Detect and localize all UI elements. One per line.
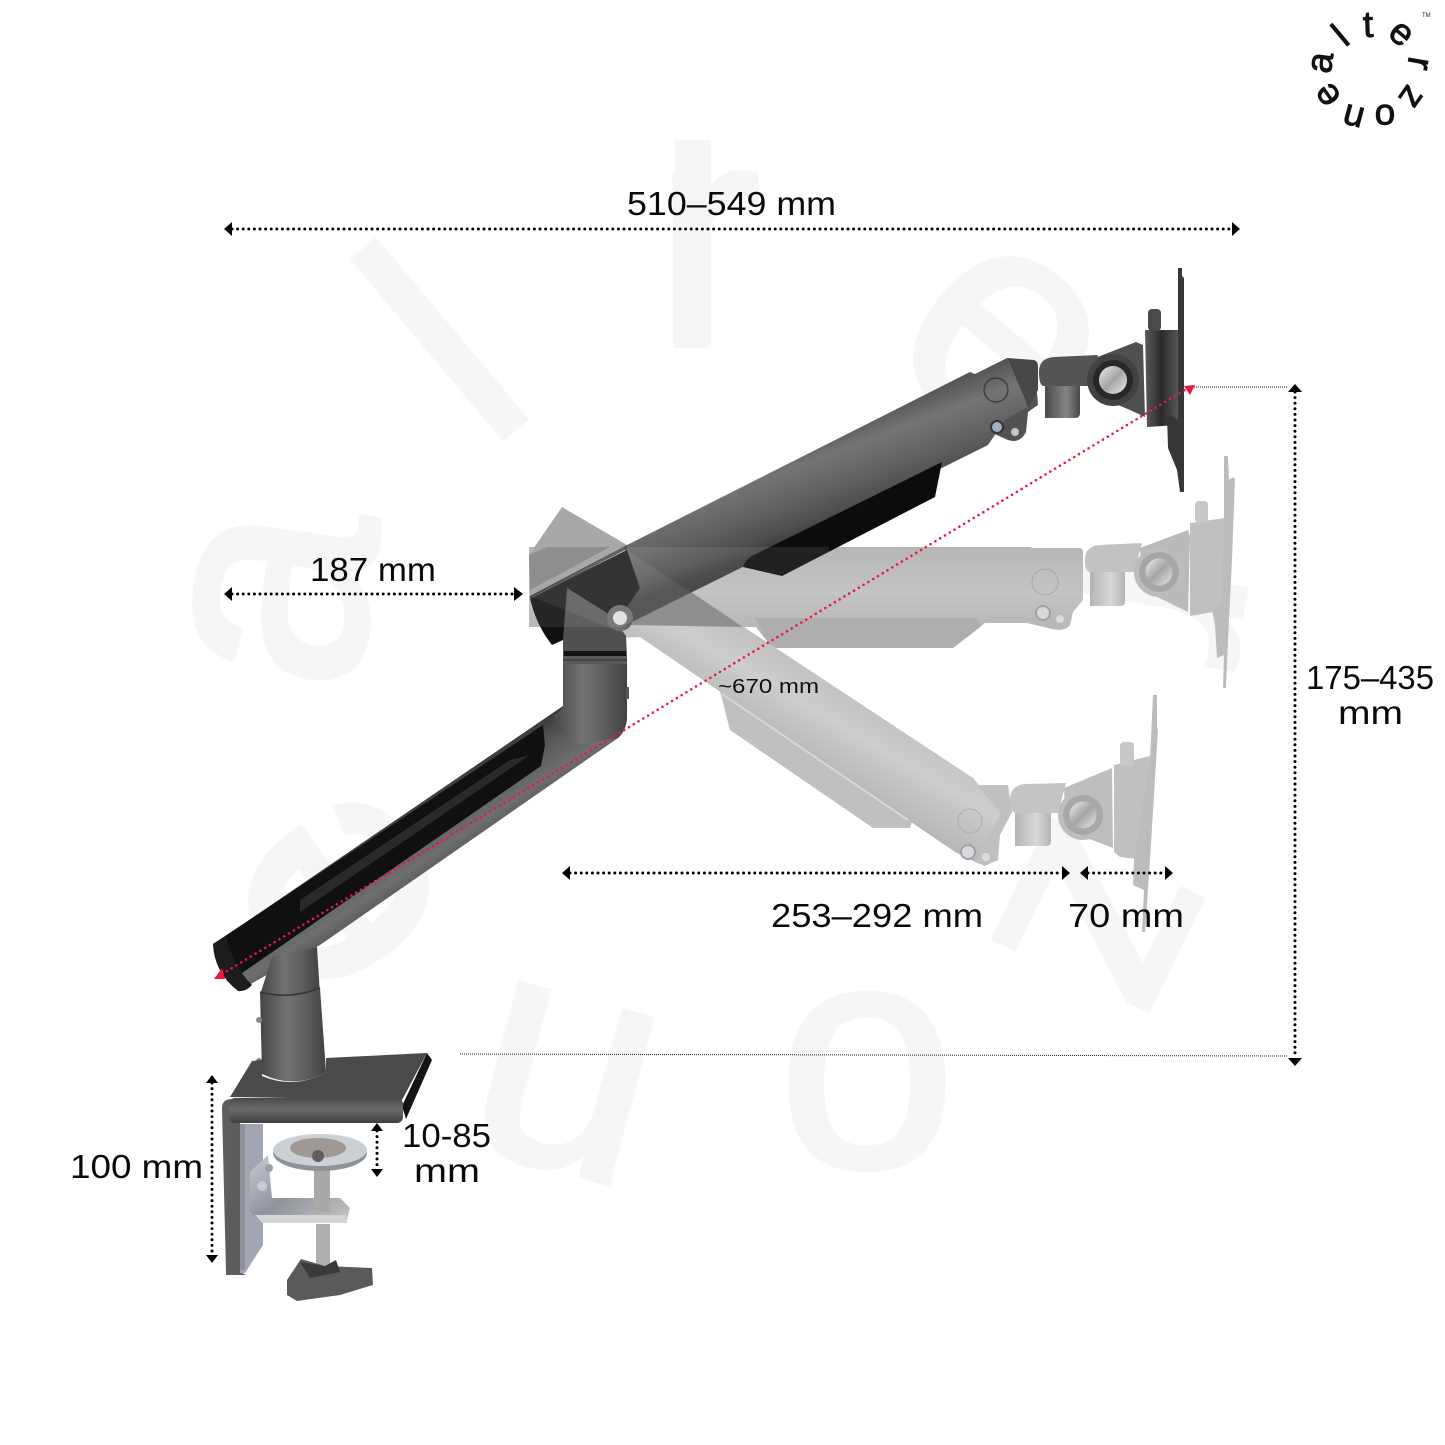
watermark: large brand letters: n bbox=[425, 913, 690, 1305]
dimension: 70 mm bbox=[1068, 866, 1184, 934]
watermark: large brand letters: a bbox=[68, 478, 447, 706]
dimension: 100 mm bbox=[70, 1075, 218, 1263]
brand logo: e bbox=[1303, 76, 1349, 116]
dimension: 10-85 mm bbox=[371, 1117, 491, 1189]
ghost arm: lowered position bbox=[529, 507, 1158, 932]
watermark: large brand letters: e bbox=[119, 732, 515, 1084]
watermark: large brand letters bbox=[68, 55, 1368, 1305]
ghost overlap highlight on dark parts bbox=[530, 547, 829, 632]
dimension: diagonal ~670 mm bbox=[214, 385, 1195, 979]
brand logo: e bbox=[1381, 10, 1423, 55]
upper dark arm bbox=[600, 358, 1038, 625]
dimension: 10-85 mm: 10-85 bbox=[402, 1117, 491, 1154]
brand logo: TM bbox=[1422, 13, 1431, 19]
brand logo: a bbox=[1298, 49, 1341, 76]
dimension: 70 mm: 70 mm bbox=[1068, 897, 1184, 934]
watermark: large brand letters: o bbox=[778, 929, 956, 1287]
dimension: 253–292 mm bbox=[562, 866, 1070, 934]
brand logo: z bbox=[1391, 79, 1435, 117]
dimension: 10-85 mm: mm bbox=[414, 1152, 480, 1189]
ghost overlap: translucent end wedge bbox=[529, 507, 743, 627]
dark monitor head bbox=[1039, 268, 1184, 492]
brand logo: l bbox=[1324, 17, 1357, 54]
brand logo: t bbox=[1362, 4, 1375, 45]
lower dark arm bbox=[213, 655, 629, 991]
brand logo: o bbox=[1375, 97, 1395, 138]
clamp hardware bbox=[240, 1124, 373, 1301]
dimension: 187 mm bbox=[224, 551, 523, 601]
ghost arm: horizontal position bbox=[529, 456, 1235, 688]
brand logo bbox=[1298, 4, 1442, 141]
dimension: height 175–435 mm bbox=[460, 384, 1434, 1066]
brand logo: n bbox=[1338, 96, 1368, 141]
watermark: large brand letters: r bbox=[997, 527, 1368, 694]
watermark: large brand letters: e bbox=[835, 131, 1201, 520]
dimension: 187 mm: 187 mm bbox=[310, 551, 436, 588]
base column bbox=[256, 947, 326, 1082]
dimension: total reach 510–549 mm bbox=[224, 185, 1240, 236]
dimension: diagonal ~670 mm: ~670 mm bbox=[718, 676, 819, 698]
dimension: height 175–435 mm: 175–435 bbox=[1306, 659, 1434, 696]
watermark: large brand letters: r bbox=[654, 55, 761, 413]
dimension: 100 mm: 100 mm bbox=[70, 1148, 203, 1185]
brand logo: r bbox=[1399, 54, 1442, 73]
watermark: large brand letters: l bbox=[300, 183, 585, 503]
dimension: 253–292 mm: 253–292 mm bbox=[771, 897, 983, 934]
black arm end cap with joint bbox=[530, 545, 640, 664]
dimension: height 175–435 mm: mm bbox=[1338, 694, 1403, 731]
watermark: large brand letters: z bbox=[926, 779, 1318, 1080]
clamp base plate bbox=[222, 1053, 432, 1275]
dimension: total reach 510–549 mm: 510–549 mm bbox=[627, 185, 836, 222]
